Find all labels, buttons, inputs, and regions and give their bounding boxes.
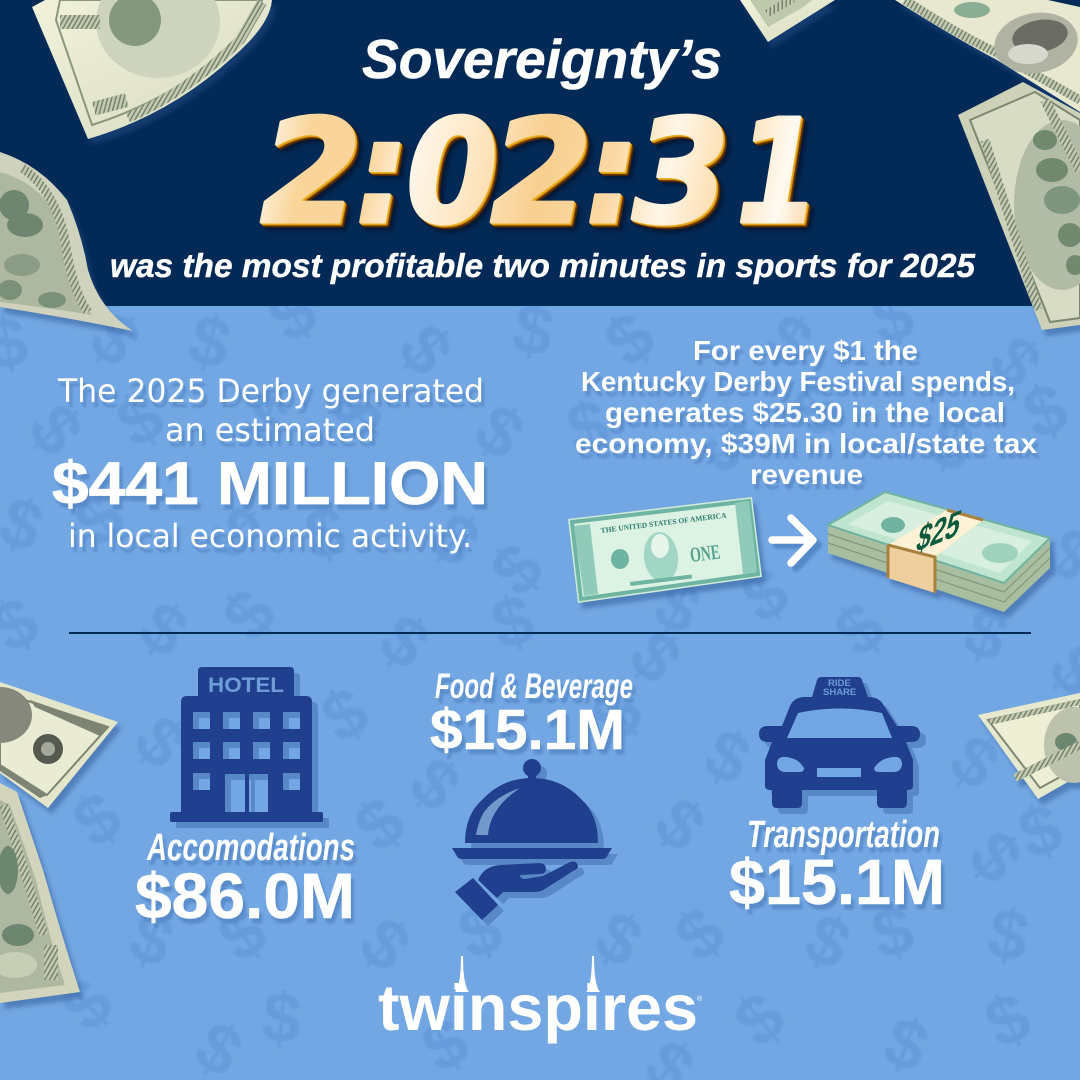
dollar sign background pattern: $ <box>104 376 176 463</box>
dollar sign background pattern: $ <box>640 782 720 867</box>
dollar sign background pattern: $ <box>590 297 669 381</box>
dollar sign background pattern: $ <box>720 977 799 1061</box>
one dollar bill illustration: THE UNITED STATES OF AMERICA <box>600 511 727 535</box>
subtitle: was the most profitable two minutes in sports for 2025 <box>110 247 976 284</box>
dollar sign background pattern: $ <box>507 288 559 372</box>
dollar sign background pattern: $ <box>395 742 475 827</box>
gold race time 2:02:31: 0 <box>406 88 498 256</box>
dollar sign background pattern: $ <box>259 977 304 1058</box>
gold race time 2:02:31: 2 <box>260 88 362 256</box>
rideshare sign <box>823 678 856 698</box>
car grille <box>817 768 861 777</box>
bill: right large <box>958 82 1080 330</box>
dollar sign background pattern: $ <box>204 891 280 977</box>
bill: lower left upper <box>0 682 118 808</box>
dollar sign background pattern <box>0 271 1080 1080</box>
left stat: $441 million: $441 MILLION <box>52 450 488 517</box>
dollar sign background pattern: $ <box>820 587 899 671</box>
dollar sign background pattern: $ <box>954 815 1037 898</box>
dollar sign background pattern: $ <box>384 310 468 389</box>
dollar sign background pattern: $ <box>461 388 538 475</box>
bill: top left <box>32 0 272 139</box>
dollar sign background pattern: $ <box>955 591 1018 677</box>
gold race time 2:02:31: 2 <box>490 88 592 256</box>
dollar sign background pattern: $ <box>794 898 862 985</box>
dollar sign background pattern: $ <box>315 373 398 456</box>
dollar sign background pattern: $ <box>688 409 774 485</box>
dollar sign background pattern: $ <box>920 401 983 487</box>
gold race time 2:02:31: 1 <box>736 88 820 256</box>
right stat: every $1 text: For every $1 the <box>693 335 918 366</box>
dollar sign background pattern: $ <box>475 528 558 611</box>
dollar sign background pattern: $ <box>974 320 1057 403</box>
dollar sign background pattern: $ <box>644 563 712 650</box>
dollar sign background pattern: $ <box>448 887 512 974</box>
dollar sign background pattern: $ <box>728 551 801 638</box>
icon: hotel <box>170 667 323 822</box>
stat: transportation <box>729 814 945 918</box>
logo: twinspires: twinspires <box>378 971 698 1044</box>
dollar sign background pattern: $ <box>59 776 135 862</box>
dollar sign background pattern: $ <box>936 718 1013 805</box>
dollar sign background pattern: $ <box>235 376 298 462</box>
dollar sign background pattern: $ <box>366 598 443 685</box>
stat: transportation: Transportation <box>747 814 940 856</box>
right stat: every $1 text: generates $25.30 in the local <box>605 397 1005 428</box>
hotel sign text: HOTEL <box>208 674 284 697</box>
rideshare sign: RIDE <box>828 678 851 689</box>
icon: cloche on hand <box>452 759 612 920</box>
dollar sign background pattern: $ <box>415 497 495 582</box>
arrow <box>772 518 813 563</box>
dollar sign background pattern: $ <box>340 782 419 866</box>
dollar sign background pattern: $ <box>694 713 762 800</box>
dollar sign background pattern: $ <box>559 384 616 469</box>
dollar sign background pattern: $ <box>779 366 855 452</box>
stat: accomodations <box>135 827 355 932</box>
dollar sign background pattern: $ <box>14 390 98 469</box>
rideshare sign: SHARE <box>823 687 856 698</box>
left stat: $441 million: in local economic activity. <box>68 517 472 555</box>
dollar sign background pattern: $ <box>254 271 330 357</box>
left stat: $441 million: an estimated <box>165 411 375 449</box>
dollar sign background pattern: $ <box>194 490 277 573</box>
one dollar bill illustration <box>568 497 762 603</box>
dollar sign background pattern: $ <box>614 615 697 698</box>
left stat: $441 million <box>52 372 488 555</box>
dollar sign background pattern: $ <box>128 585 200 672</box>
dollar sign background pattern: $ <box>1008 787 1072 874</box>
stat: accomodations: Accomodations <box>146 827 355 869</box>
one dollar bill illustration: ONE <box>689 539 721 567</box>
stat: transportation: $15.1M <box>729 846 945 918</box>
dollar sign background pattern: $ <box>299 491 351 575</box>
bill: left curled <box>0 152 133 331</box>
dollar sign background pattern: $ <box>864 889 921 974</box>
dollar sign background pattern: $ <box>45 963 128 1046</box>
car headlights <box>777 757 902 772</box>
dollar sign background pattern: $ <box>982 893 1034 977</box>
bill: right side <box>978 693 1080 799</box>
bill: top centre right <box>740 0 835 42</box>
stat: food and beverage: $15.1M <box>430 698 625 762</box>
gold race time 2:02:31: 3 <box>632 88 730 256</box>
car windshield <box>787 708 892 738</box>
gold race time 2:02:31 <box>260 88 820 256</box>
dollar sign background pattern: $ <box>120 896 183 982</box>
gold race time 2:02:31: : <box>585 88 639 256</box>
dollar sign background pattern: $ <box>484 579 541 664</box>
money stack illustration: $25 <box>913 501 965 561</box>
gold race time 2:02:31: : <box>355 88 409 256</box>
dollar sign background pattern: $ <box>345 902 425 987</box>
dollar sign background pattern: $ <box>660 892 739 976</box>
dollar sign background pattern: $ <box>75 297 155 382</box>
dollar sign background pattern: $ <box>181 299 239 385</box>
left stat: $441 million: The 2025 Derby generated <box>57 372 484 410</box>
right stat: every $1 text: revenue <box>750 459 863 490</box>
dollar sign background pattern: $ <box>582 895 655 982</box>
icon: rideshare car <box>759 677 920 808</box>
dollar sign background pattern: $ <box>207 575 292 655</box>
header band <box>0 0 1080 306</box>
dollar sign background pattern: $ <box>60 477 139 561</box>
dollar sign background pattern: $ <box>864 274 921 359</box>
right stat: every $1 text: Kentucky Derby Festival spends, <box>581 366 1015 397</box>
dollar sign background pattern: $ <box>575 673 658 756</box>
divider <box>69 632 1031 634</box>
dollar sign background pattern: $ <box>973 976 1042 1064</box>
stat: food and beverage <box>430 667 633 762</box>
bill: lower left lower <box>0 783 80 1003</box>
logo: twinspires: ® <box>697 995 703 1003</box>
bill: top right with portrait <box>895 0 1080 112</box>
right stat: every $1 text: economy, $39M in local/state tax <box>575 428 1037 459</box>
money stack illustration <box>828 492 1050 612</box>
dollar sign background pattern: $ <box>1013 367 1077 454</box>
stat: accomodations: $86.0M <box>135 860 355 932</box>
stat: food and beverage: Food & Beverage <box>435 667 633 706</box>
dollar sign background pattern: $ <box>752 297 825 384</box>
cloche highlight <box>476 788 520 835</box>
dollar sign background pattern: $ <box>119 700 202 783</box>
title: Sovereignty's: Sovereignty’s <box>362 28 722 90</box>
dollar sign background pattern: $ <box>308 671 381 758</box>
right stat: every $1 text <box>575 335 1037 490</box>
